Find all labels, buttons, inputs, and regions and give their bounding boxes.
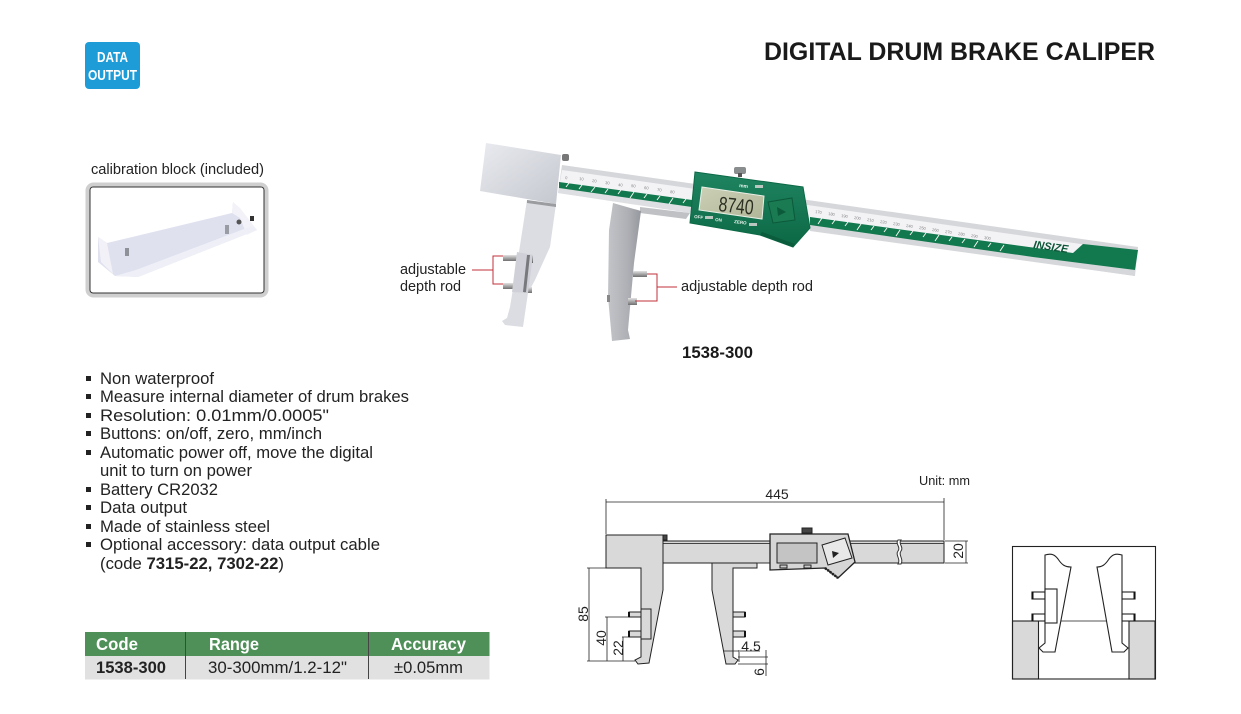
outer frame (1012, 546, 1156, 679)
scale numerals: 210 (867, 217, 875, 223)
button labels: ON (715, 217, 722, 223)
dimension values: 22 (610, 640, 626, 656)
table row: 30-300mm/1.2-12" (208, 658, 347, 677)
scale numerals (565, 175, 992, 241)
feature list: (code 7315-22, 7302-22) (100, 554, 284, 573)
sliding jaw (607, 203, 690, 341)
feature list: Battery CR2032 (100, 480, 218, 499)
dimension values: 20 (950, 543, 966, 559)
technical drawing: usage view (1012, 546, 1156, 679)
drum wall blocks (1012, 621, 1155, 679)
green scale stripe (559, 182, 692, 207)
scale numerals: 230 (893, 221, 901, 227)
dimension values: 40 (593, 630, 609, 646)
left jaw (1032, 554, 1071, 652)
calibration frame (88, 184, 266, 296)
drawing sliding jaw (712, 563, 770, 664)
badge: data output: OUTPUT (88, 67, 137, 84)
scale numerals: 0 (565, 175, 569, 180)
feature list (86, 369, 409, 573)
adjustable rods on fixed jaw (503, 252, 533, 293)
scale numerals: 20 (592, 178, 598, 184)
technical drawing: front view (575, 473, 970, 676)
table header: Accuracy (391, 634, 466, 654)
callout: adjustable depth rod left: depth rod (400, 278, 461, 295)
callout: adjustable depth rod right: adjustable depth rod (681, 278, 813, 295)
scale numerals: 70 (657, 187, 663, 193)
badge: data output: DATA (97, 49, 128, 66)
scale numerals: 30 (605, 180, 611, 186)
button labels: ZERO (734, 219, 747, 226)
scale numerals: 270 (945, 229, 953, 235)
scale numerals: 40 (618, 182, 624, 188)
feature list: Measure internal diameter of drum brakes (100, 387, 409, 406)
digital display unit (690, 167, 810, 247)
panel: calibration block (88, 161, 266, 296)
lcd screen: 8740 (717, 193, 755, 220)
fixed jaw (480, 143, 569, 327)
feature list: Non waterproof (100, 369, 214, 388)
feature list: Made of stainless steel (100, 517, 270, 536)
callout: adjustable depth rod left: adjustable (400, 261, 466, 278)
dimension values: 6 (751, 668, 767, 676)
model number: 1538-300 (682, 344, 753, 362)
unit label: Unit: mm (919, 473, 970, 488)
table row: 1538-300 (96, 658, 166, 677)
scale ticks (566, 183, 1004, 251)
feature list: Resolution: 0.01mm/0.0005" (100, 406, 329, 425)
dimension values: 445 (765, 486, 789, 502)
dimension values: 4.5 (741, 638, 761, 654)
feature list: Data output (100, 498, 187, 517)
button labels (694, 183, 763, 226)
right jaw (1097, 554, 1135, 652)
title: DIGITAL DRUM BRAKE CALIPER (764, 38, 1155, 66)
brand logo: INSIZE (1033, 239, 1070, 256)
dimension values: 85 (575, 606, 591, 622)
scale numerals: 240 (906, 223, 914, 229)
scale numerals: 260 (932, 227, 940, 233)
feature list: Buttons: on/off, zero, mm/inch (100, 424, 322, 443)
drawing display unit (770, 528, 855, 578)
scale numerals: 290 (971, 233, 979, 239)
scale numerals: 80 (670, 189, 676, 195)
button labels: mm (739, 183, 749, 190)
calibration caption: calibration block (included) (91, 161, 264, 178)
drawing fixed jaw (606, 535, 667, 664)
scale numerals: 200 (854, 215, 862, 221)
feature list: unit to turn on power (100, 461, 252, 480)
badge: data output (85, 42, 140, 89)
table row: ±0.05mm (394, 658, 463, 677)
button labels: OFF (694, 214, 704, 220)
beam (558, 165, 1138, 276)
callout: adjustable depth rod left (400, 256, 503, 295)
scale numerals: 220 (880, 219, 888, 225)
scale numerals: 250 (919, 225, 927, 231)
feature list: Automatic power off, move the digital (100, 443, 373, 462)
scale numerals: 180 (828, 211, 836, 217)
dimension lines (587, 498, 968, 676)
table row (96, 658, 463, 677)
icon: calibration block (98, 202, 257, 277)
table header (96, 634, 466, 654)
scale numerals: 10 (579, 176, 585, 182)
scale numerals: 280 (958, 231, 966, 237)
scale numerals: 170 (815, 209, 823, 215)
scale numerals: 50 (631, 183, 637, 189)
callout: adjustable depth rod right (635, 274, 813, 301)
drawing beam (663, 540, 944, 564)
specification table (85, 632, 490, 680)
scale numerals: 190 (841, 213, 849, 219)
feature list: Optional accessory: data output cable (100, 535, 380, 554)
table header: Code (96, 634, 138, 654)
scale numerals: 60 (644, 185, 650, 191)
dimension values (575, 486, 966, 676)
photo: digital caliper (480, 143, 1138, 341)
scale numerals: 300 (984, 235, 992, 241)
table header: Range (209, 634, 259, 654)
arrow button (768, 198, 795, 223)
